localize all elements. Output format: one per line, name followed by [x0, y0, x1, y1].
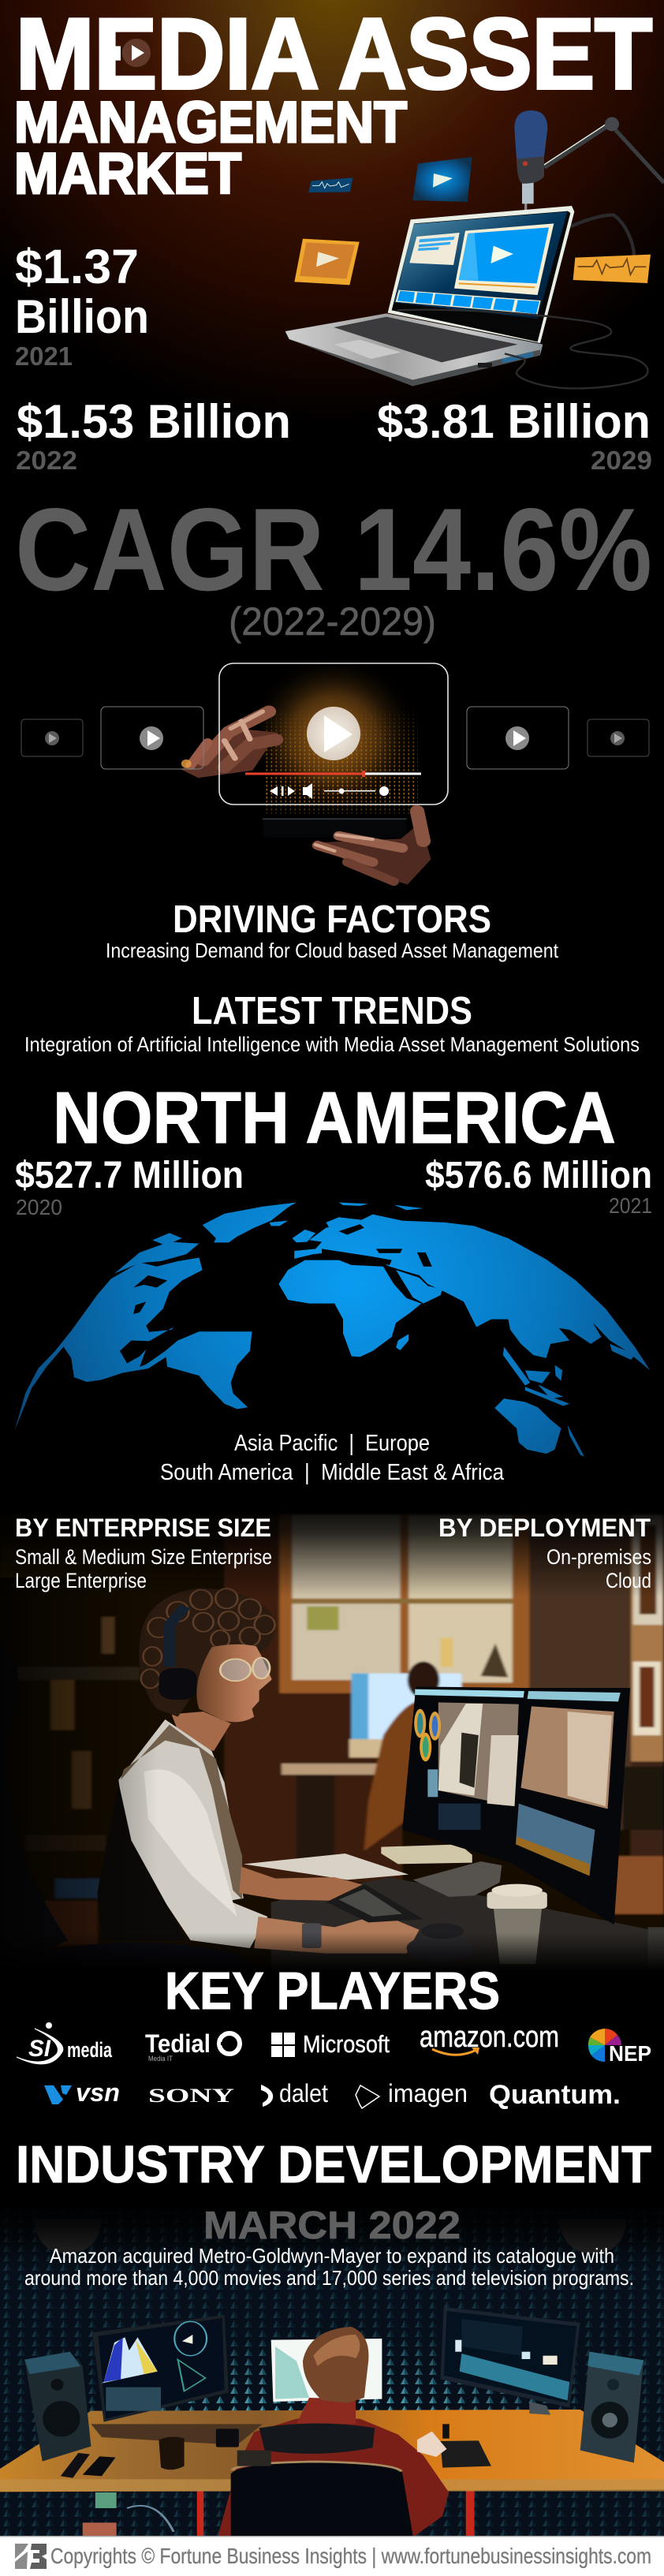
chair [0, 1646, 68, 1972]
stat: north america 2020: 2020 [16, 1195, 62, 1219]
heading: north america: NORTH AMERICA [53, 1077, 616, 1159]
icon: play button in title [121, 34, 151, 71]
stat: 2029 market value: 2029 [591, 446, 652, 475]
list: enterprise size: Large Enterprise [15, 1569, 147, 1592]
book stack [381, 1844, 472, 1864]
desk [271, 1877, 664, 1972]
icon: orange wave tile [573, 255, 651, 283]
photo: studio workstation [0, 2201, 664, 2536]
woman: hair and headphones [139, 1588, 276, 1717]
microphone [514, 110, 664, 211]
heading: by enterprise size: BY ENTERPRISE SIZE [15, 1514, 271, 1542]
stat: north america 2020 [15, 1155, 244, 1219]
logo: tedial: Media IT [148, 2055, 173, 2063]
woman: arms and hands [239, 1867, 420, 1954]
text: other regions: South America | Middle East & Africa [160, 1460, 505, 1485]
man: body [218, 2419, 449, 2536]
photo: editor at monitors [0, 1499, 664, 1972]
heading: latest trends: LATEST TRENDS [192, 990, 472, 1032]
greenland [203, 1202, 297, 1242]
woman: face [196, 1645, 272, 1722]
screen: video window [454, 223, 554, 295]
logo: sony: SONY [148, 2085, 234, 2107]
center monitor [271, 2339, 382, 2402]
monitor stand [413, 1861, 502, 1897]
play icons: side [45, 726, 625, 750]
map: world globe [15, 1202, 650, 1457]
hand on tablet [417, 2432, 447, 2457]
text: other regions [160, 1431, 505, 1485]
screen: text window [409, 233, 460, 265]
footer [0, 2536, 664, 2576]
digital dots [264, 710, 418, 814]
phone and lower hand [263, 811, 427, 882]
southeast asia islands [503, 1346, 530, 1386]
south america [165, 1331, 252, 1409]
papers [244, 1854, 408, 1880]
photo background [0, 1514, 664, 1972]
stat: 2022 market value: 2022 [16, 446, 77, 475]
logo: imagen [356, 2079, 468, 2108]
icon: orange video tile [294, 239, 360, 285]
title line: market: MARKET [14, 142, 241, 206]
chair base [21, 1942, 263, 1972]
logo: si media: SI [28, 2036, 51, 2062]
stat: north america 2020: $527.7 Million [15, 1155, 244, 1197]
panel: header background [0, 0, 664, 442]
illustration: laptop and microphone [285, 110, 664, 389]
stat: north america 2021: $576.6 Million [425, 1155, 652, 1197]
eurasia [294, 1215, 650, 1370]
stat: 2021 market value: Billion [15, 290, 149, 343]
logo: imagen: imagen [388, 2079, 468, 2107]
left monitor [92, 2315, 229, 2422]
logo: microsoft: Microsoft [303, 2030, 390, 2058]
text: development detail [24, 2244, 634, 2290]
woman: glasses [220, 1658, 270, 1681]
left monitor [402, 1686, 525, 1865]
desk objects [61, 2424, 491, 2478]
screen: thumbnails [396, 290, 541, 314]
top fade [0, 2201, 664, 2272]
title line: management: MANAGEMENT [14, 91, 407, 155]
laptop cable [397, 310, 647, 389]
text: development detail: Amazon acquired Metro-Goldwyn-Mayer to expand its catalogue with [50, 2244, 614, 2268]
list: deployment: Cloud [606, 1569, 651, 1592]
logo: vsn [44, 2078, 120, 2107]
icon: fortune business insights logo [15, 2544, 47, 2569]
logo: dalet: dalet [279, 2079, 328, 2107]
foam wall [0, 2208, 664, 2536]
illustration: video player with hands [21, 655, 649, 882]
logo: nep [588, 2029, 651, 2066]
man: turtleneck [297, 2398, 356, 2424]
right monitor [440, 2307, 580, 2415]
pencils [648, 1927, 664, 1969]
trackball [407, 1935, 474, 1962]
africa [278, 1260, 421, 1357]
ceiling lamps [34, 2219, 627, 2253]
bottom fade [0, 1932, 664, 1972]
logo: nep: NEP [609, 2041, 651, 2066]
heading: by deployment: BY DEPLOYMENT [438, 1514, 651, 1542]
title [14, 0, 652, 206]
laptop base [285, 313, 543, 386]
icon: small wave tile [308, 177, 353, 192]
logo: tedial [145, 2029, 240, 2063]
play button: center [307, 707, 360, 760]
logo: microsoft [271, 2030, 390, 2058]
stat: 2022 market value: $1.53 Billion [17, 395, 291, 448]
stat: 2029 market value [377, 395, 652, 475]
mouse [421, 1923, 464, 1939]
woman: shirt and vest [98, 1719, 267, 1948]
right speaker [580, 2352, 643, 2462]
logo: si media: media [67, 2038, 113, 2062]
glow [247, 655, 420, 820]
icon: blue video tile [412, 157, 472, 202]
australia [494, 1398, 561, 1454]
left speaker [24, 2352, 91, 2462]
logo: vsn: vsn [76, 2078, 120, 2107]
woman: neck [171, 1712, 231, 1751]
stat: 2021 market value: 2021 [15, 342, 73, 371]
stat: 2021 market value [15, 240, 149, 371]
video frames: side [21, 707, 649, 769]
stat: 2021 market value: $1.37 [15, 240, 139, 293]
stat: north america 2021 [425, 1155, 652, 1218]
logo row: key player logos [17, 2021, 651, 2110]
stat: north america 2021: 2021 [609, 1193, 652, 1218]
progress bar [245, 771, 421, 777]
under desk [83, 2488, 474, 2536]
text: development date: MARCH 2022 [203, 2205, 461, 2247]
right monitor [510, 1688, 630, 1925]
hand: upper [181, 711, 276, 775]
top fade [0, 1499, 664, 1597]
text: other regions: Asia Pacific | Europe [234, 1431, 430, 1456]
logo: si media [17, 2022, 113, 2064]
right cable [570, 215, 634, 256]
logo: amazon: amazon.com [420, 2021, 559, 2054]
laptop lid [388, 206, 574, 343]
keyboard [326, 1883, 423, 1922]
heading: key players: KEY PLAYERS [165, 1962, 500, 2021]
text: driving factor detail: Increasing Demand for Cloud based Asset Management [106, 939, 559, 962]
heading: driving factors: DRIVING FACTORS [173, 898, 491, 941]
player controls [270, 783, 389, 799]
logo: dalet [261, 2079, 328, 2107]
video frame: center [219, 663, 448, 805]
logo: quantum: Quantum. [489, 2080, 621, 2110]
coffee cup [487, 1884, 547, 1964]
cagr period: (2022-2029) [229, 599, 436, 644]
list: enterprise size: Small & Medium Size Enterprise [15, 1545, 272, 1569]
man: head [303, 2327, 368, 2403]
stat: 2022 market value [16, 395, 291, 475]
left shade [0, 1577, 158, 1972]
list: deployment [546, 1545, 651, 1592]
list: enterprise size [15, 1545, 272, 1592]
desk top [0, 2410, 664, 2492]
panel: key players background [0, 1972, 664, 2208]
chair [231, 2423, 413, 2536]
north america [15, 1258, 203, 1430]
logo: tedial: Tedial [145, 2029, 211, 2058]
stat: 2029 market value: $3.81 Billion [377, 395, 651, 448]
inland seas [322, 1224, 432, 1267]
